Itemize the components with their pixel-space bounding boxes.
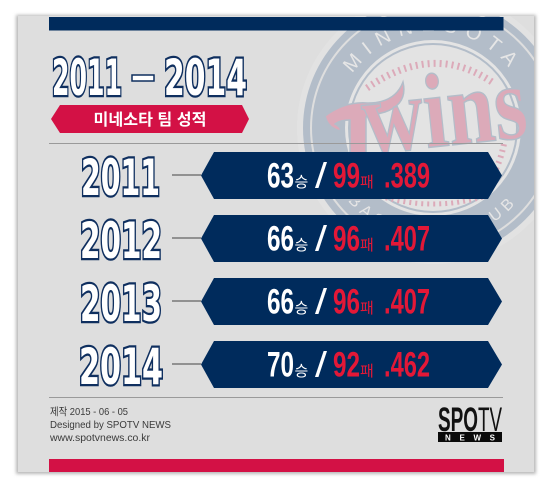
- row 2014: 70: [267, 346, 294, 384]
- title: 2011 - 2014: 2014: [164, 49, 247, 107]
- row 2012: 패: [360, 237, 374, 254]
- top navy bar: [49, 17, 504, 30]
- row 2014: 승: [294, 363, 308, 380]
- subtitle ribbon: [51, 105, 249, 133]
- row 2014: 2014: [79, 338, 163, 396]
- row 2014: .462: [384, 346, 430, 384]
- row 2013: 96: [333, 282, 360, 322]
- logo: SPOTV NEWS: TV: [478, 401, 502, 439]
- divider line top: [49, 143, 503, 144]
- row 2013: 2013: [80, 275, 162, 333]
- row 2013: .407: [384, 282, 430, 322]
- row 2012: 96: [333, 220, 360, 258]
- row 2011: 승: [294, 174, 308, 191]
- icon: faded Minnesota Twins logo watermark: wins: [356, 42, 532, 177]
- row 2013: [80, 275, 502, 333]
- footer credits: www.spotvnews.co.kr: [49, 432, 150, 444]
- row 2011: /: [315, 156, 327, 196]
- row 2011: 2011: [81, 149, 160, 207]
- title: 2011 - 2014: 2011: [52, 49, 122, 107]
- footer credits: Designed by SPOTV NEWS: [50, 419, 171, 431]
- row 2012: [80, 212, 502, 270]
- logo: SPOTV NEWS: NEWS: [445, 434, 496, 442]
- row 2011: 63: [267, 156, 294, 196]
- icon: faded Minnesota Twins logo watermark: MINNESOTA: [342, 30, 516, 72]
- logo: SPOTV NEWS: SPO: [438, 401, 478, 439]
- icon: faded Minnesota Twins logo watermark: BASEBALL CLUB: [348, 199, 513, 220]
- row 2012: 2012: [80, 212, 162, 270]
- row 2011: 패: [360, 174, 374, 191]
- row 2014: /: [315, 346, 327, 384]
- row 2013: 패: [360, 300, 374, 317]
- row 2012: 승: [294, 237, 308, 254]
- row 2014: 패: [360, 363, 374, 380]
- row 2013: 66: [267, 282, 294, 322]
- row 2013: /: [315, 282, 327, 322]
- row 2011: .389: [384, 156, 430, 196]
- divider line bottom: [49, 397, 503, 398]
- row 2012: /: [315, 220, 327, 258]
- bottom red bar: [49, 459, 504, 472]
- icon: faded Minnesota Twins logo watermark: [303, 16, 534, 238]
- footer credits: [49, 406, 171, 444]
- row 2011: 99: [333, 156, 360, 196]
- row 2012: .407: [384, 220, 430, 258]
- row 2014: [79, 338, 502, 396]
- row 2012: 66: [267, 220, 294, 258]
- row 2014: 92: [333, 346, 360, 384]
- row 2013: 승: [294, 300, 308, 317]
- row 2011: [81, 149, 502, 207]
- footer credits: 제작 2015 - 06 - 05: [50, 406, 128, 418]
- subtitle ribbon: 미네소타 팀 성적: [94, 111, 206, 129]
